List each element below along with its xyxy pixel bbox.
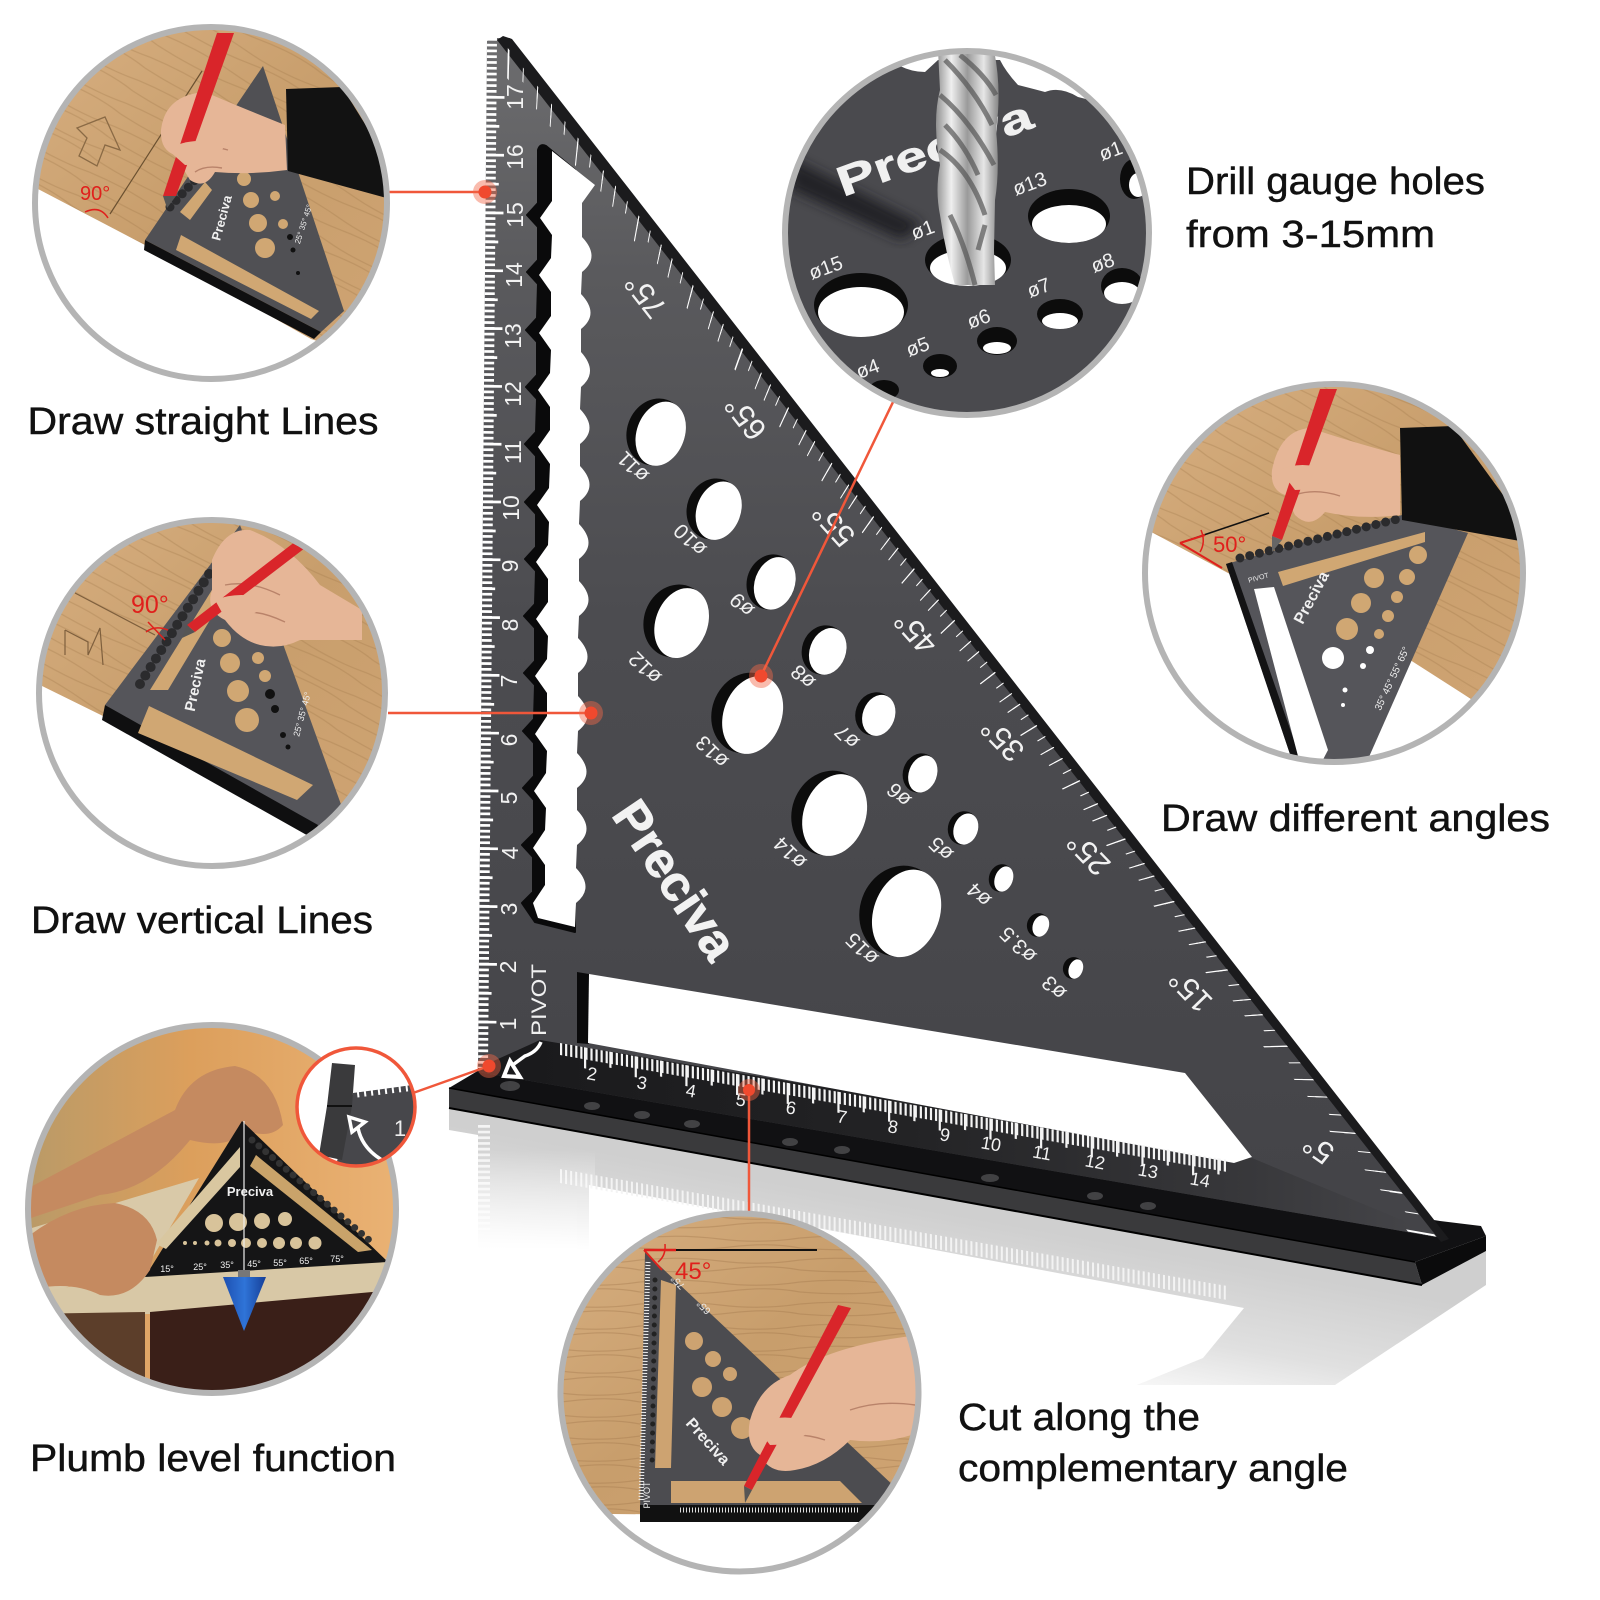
main rafter square	[448, 36, 1486, 1286]
hole 7	[831, 687, 901, 753]
base ruler numbers: 7	[835, 1106, 849, 1128]
panel: plumb level photo	[20, 1020, 400, 1400]
lower window	[577, 972, 1252, 1163]
degree labels: 75°	[617, 266, 674, 325]
angle mark 50 degrees: 50°	[1213, 532, 1246, 557]
degree labels: 45°	[887, 604, 944, 662]
left ruler numbers: 13	[500, 323, 526, 349]
close-up hole labels: ø1	[1096, 137, 1126, 166]
left ruler numbers: 11	[500, 440, 526, 464]
caption: cut along the complementary angle	[958, 1397, 1348, 1490]
brand name: Preciva	[601, 790, 749, 971]
close-up hole labels: ø1	[908, 216, 938, 245]
base ruler numbers: 3	[635, 1072, 649, 1094]
sleeve	[286, 87, 390, 199]
base ruler numbers: 8	[886, 1116, 900, 1138]
angle mark 50 degrees	[1180, 513, 1269, 568]
degree labels: 35°	[973, 711, 1031, 769]
tiny ruler ticks	[357, 1086, 415, 1093]
left ruler numbers: 5	[496, 792, 522, 804]
degree labels: 65°	[717, 388, 774, 447]
mini square held upright: 45°	[247, 1259, 261, 1269]
upper arm and hand	[25, 1066, 283, 1220]
mini square held upright: Preciva	[227, 1184, 274, 1199]
hole 14: ø14	[769, 831, 811, 874]
connector: straight lines	[388, 180, 497, 204]
mini square held upright	[145, 1121, 388, 1277]
pivot arrow	[504, 1042, 541, 1077]
hole 9: ø9	[726, 588, 759, 621]
red pencil	[1272, 389, 1337, 552]
number 1: 1	[394, 1116, 406, 1141]
base ruler numbers: 11	[1031, 1142, 1053, 1164]
90 degree mark: 90°	[131, 591, 169, 619]
workbench	[25, 1178, 395, 1400]
hypotenuse bevel	[497, 36, 1449, 1242]
caption: drill gauge holes: Drill gauge holes	[1186, 161, 1485, 203]
left ruler ticks	[483, 38, 496, 1068]
hole 13	[691, 663, 794, 773]
mini square held upright: 65°	[299, 1256, 313, 1266]
90 degree mark: 90°	[80, 183, 110, 205]
wood board	[550, 1200, 930, 1516]
wood board	[42, 523, 382, 804]
hand	[161, 92, 287, 184]
hand	[210, 530, 362, 647]
close-up hole labels: ø5	[903, 333, 933, 362]
brand: Preciva	[830, 91, 1040, 205]
plumb bob	[223, 1270, 266, 1331]
mini square: Preciva	[682, 1415, 733, 1469]
hole 10: ø10	[669, 519, 711, 561]
hole 14	[769, 760, 878, 874]
wood board	[1152, 387, 1520, 699]
caption: draw straight lines: Draw straight Lines	[28, 401, 378, 443]
hole 4	[962, 861, 1017, 911]
mini square	[102, 525, 343, 838]
hole 12: ø12	[624, 647, 666, 689]
sleeve	[1400, 426, 1520, 541]
90 degree mark	[132, 595, 168, 640]
PIVOT label: PIVOT	[528, 964, 551, 1036]
left ruler numbers: 2	[495, 961, 521, 973]
drawn arrow outline	[77, 117, 120, 166]
mini square: 25° 35° 45°	[291, 690, 313, 738]
shadow of drill	[790, 158, 922, 240]
left ruler numbers: 1	[495, 1018, 521, 1030]
panel: drill gauge close-up	[785, 40, 1149, 415]
connector: drill gauge	[749, 400, 894, 688]
left ruler numbers: 16	[502, 144, 528, 170]
angle mark 45 degrees	[644, 1244, 817, 1285]
base ruler numbers: 10	[979, 1132, 1003, 1156]
wood board	[38, 30, 384, 340]
close-up hole labels: ø15	[806, 252, 846, 285]
hole 11	[613, 390, 695, 487]
hole 9	[726, 547, 803, 621]
left ruler numbers	[495, 84, 528, 1030]
hole 15: ø15	[841, 928, 883, 970]
left ruler numbers: 7	[496, 675, 522, 687]
pencil lines and arrow	[65, 593, 155, 665]
plate corner	[335, 1084, 420, 1170]
mini square: PIVOT	[1248, 572, 1270, 585]
close-up hole labels	[806, 137, 1126, 384]
red pencil	[163, 33, 234, 208]
hole 5: ø5	[925, 832, 958, 865]
hole 12	[624, 575, 719, 689]
drill gauge holes	[613, 390, 1086, 1004]
close-up hole labels: ø6	[964, 305, 994, 334]
upright edge	[319, 1063, 355, 1160]
base ruler numbers: 14	[1188, 1168, 1212, 1192]
plate body	[478, 38, 1448, 1239]
reflection of the square on the floor	[449, 1108, 1486, 1400]
hole 8: ø8	[787, 660, 820, 693]
degree labels	[617, 266, 1340, 1171]
panel: draw vertical lines photo	[30, 500, 400, 866]
hole 13: ø13	[691, 731, 733, 773]
slot with scalloped edge	[522, 145, 595, 932]
close-up hole labels: ø7	[1024, 274, 1054, 303]
left ruler numbers: 15	[502, 202, 528, 228]
90 degree mark	[81, 186, 109, 218]
caption: drill gauge holes	[1186, 161, 1485, 256]
mini square	[640, 1252, 897, 1522]
red pencil	[744, 1305, 851, 1503]
left ruler numbers: 3	[496, 903, 522, 915]
degree labels: 15°	[1161, 962, 1219, 1020]
plumb string	[243, 1121, 245, 1277]
mini square held upright: 15°	[160, 1264, 174, 1274]
angle mark 45 degrees: 45°	[675, 1258, 711, 1285]
pencil line	[110, 71, 202, 214]
caption: drill gauge holes: from 3-15mm	[1186, 214, 1435, 256]
panel: complementary angle photo	[550, 1200, 930, 1572]
left ruler numbers: 14	[501, 262, 527, 288]
connector: complementary angle	[738, 1079, 760, 1214]
callout: pivot detail circle	[297, 1048, 420, 1170]
mini square	[144, 66, 344, 339]
left ruler numbers: 9	[497, 560, 523, 572]
base ruler numbers: 13	[1136, 1159, 1160, 1183]
left ruler numbers: 12	[500, 381, 526, 407]
base ruler ticks	[560, 1049, 1228, 1171]
base ruler numbers: 6	[784, 1097, 798, 1119]
hole 3.5: ø3.5	[995, 922, 1041, 968]
panel: draw different angles photo	[1140, 370, 1540, 775]
hole 11: ø11	[613, 446, 654, 487]
base ruler numbers	[585, 1063, 1212, 1192]
degree labels: 5°	[1296, 1126, 1340, 1171]
left ruler numbers: 17	[502, 84, 528, 110]
base ruler numbers: 4	[684, 1080, 698, 1102]
mini square: 25° 35° 45°	[293, 203, 314, 245]
hole 5	[925, 807, 983, 865]
left ruler numbers: 4	[497, 846, 523, 859]
caption: draw different angles: Draw different angles	[1161, 798, 1550, 840]
hole 7: ø7	[831, 720, 864, 753]
hole 4: ø4	[962, 878, 996, 911]
close-up hole labels: ø13	[1010, 168, 1050, 201]
left ruler numbers: 8	[497, 619, 523, 631]
base ruler numbers: 2	[585, 1063, 599, 1085]
degree labels: 25°	[1059, 825, 1117, 883]
pivot arrow	[349, 1117, 382, 1160]
hole 6: ø6	[883, 778, 916, 811]
hole 10	[669, 471, 750, 561]
mini square held upright: 75°	[330, 1254, 344, 1264]
lower hand	[30, 1203, 157, 1296]
panel: draw straight lines photo	[20, 20, 400, 379]
degree labels: 55°	[805, 496, 862, 554]
mini square held upright: 55°	[273, 1258, 287, 1268]
hole 8	[787, 619, 853, 693]
mini square: 75°	[669, 1273, 687, 1291]
hole 6	[883, 748, 943, 811]
caption: cut along the complementary angle: Cut along the	[958, 1397, 1200, 1439]
hole 3: ø3	[1038, 971, 1071, 1004]
hole 3.5	[995, 910, 1052, 968]
hand	[749, 1335, 925, 1471]
hole 15	[841, 854, 953, 970]
left ruler numbers: 6	[496, 734, 522, 746]
mini square: Preciva	[208, 193, 235, 242]
caption: plumb level function: Plumb level function	[30, 1438, 396, 1480]
mini square: 35° 45° 55° 65°	[1373, 645, 1412, 712]
caption: draw vertical lines: Draw vertical Lines	[31, 900, 373, 942]
hand	[1272, 428, 1400, 522]
close-up hole labels: ø8	[1088, 249, 1118, 278]
hypotenuse degree ticks	[22, 465, 950, 1600]
connector: vertical lines	[388, 701, 603, 725]
base ruler numbers: 9	[938, 1124, 952, 1146]
mini square: Preciva	[1291, 569, 1333, 627]
hole 3	[1038, 954, 1086, 1004]
mini square: 65°	[695, 1298, 713, 1316]
mini square: PIVOT	[642, 1481, 652, 1509]
close-up holes	[814, 159, 1148, 400]
ruler bar	[478, 1040, 1448, 1239]
left ruler numbers: 10	[498, 495, 524, 521]
mini square	[1226, 515, 1468, 775]
drill bit	[936, 50, 999, 285]
base platform	[449, 1066, 1486, 1285]
base ruler numbers: 5	[734, 1089, 748, 1111]
mini square held upright: 35°	[220, 1260, 234, 1270]
orange background	[31, 1028, 393, 1267]
red pencil	[182, 541, 305, 638]
caption: cut along the complementary angle: complementary angle	[958, 1448, 1348, 1490]
connector: pivot detail	[413, 1054, 501, 1093]
base ruler numbers: 12	[1083, 1150, 1107, 1174]
mini square held upright: 25°	[193, 1262, 207, 1272]
white slot edge	[901, 56, 1086, 99]
close-up hole labels: ø4	[853, 355, 883, 384]
mini square: Preciva	[182, 657, 210, 713]
